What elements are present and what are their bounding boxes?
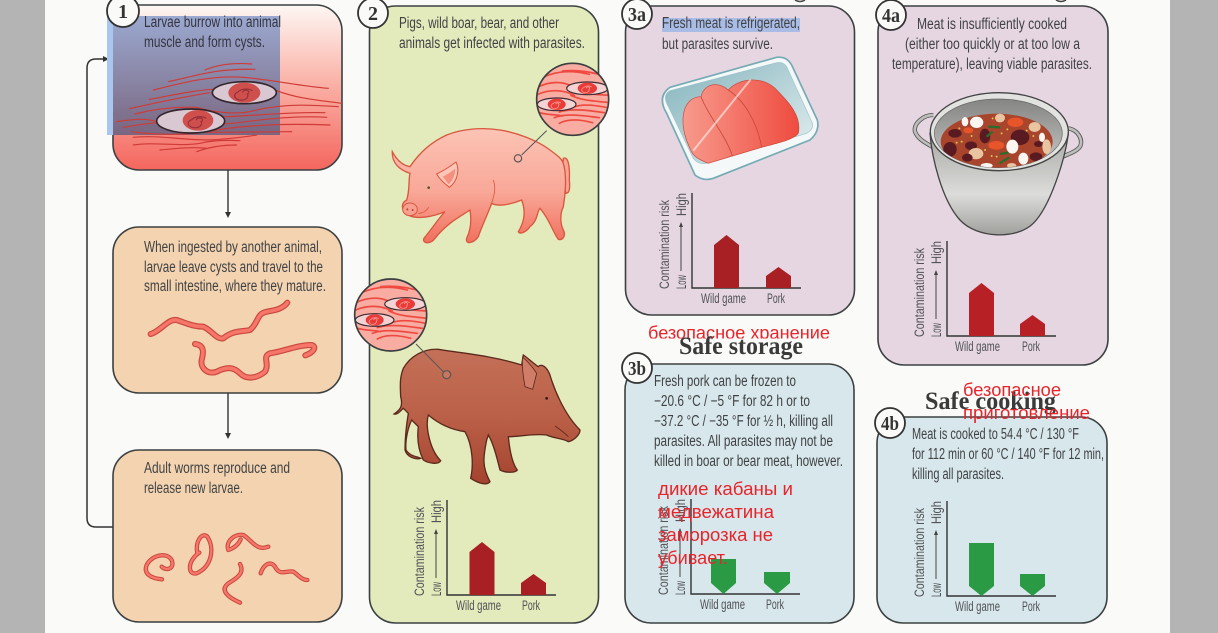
bar chart: refrigerated risk xyxy=(657,193,801,306)
bar chart: animals risk: Wild game xyxy=(456,598,501,613)
bar chart: animals risk: Low xyxy=(429,582,444,596)
icon: two long worms xyxy=(151,303,314,378)
badge 4b: 4b xyxy=(881,413,899,435)
badge 4b xyxy=(875,408,905,438)
text: ingested: larvae leave cysts and travel to the xyxy=(144,259,323,276)
bar chart: cooked risk: Contamination risk xyxy=(912,508,927,597)
text: freezing: Fresh pork can be frozen to xyxy=(654,373,796,390)
red annotation: safe storage in Russian, clipped: безопасное хранение xyxy=(648,323,830,343)
text: freezing: killed in boar or bear meat, however. xyxy=(654,453,843,470)
left grey margin xyxy=(0,0,45,633)
right grey margin xyxy=(1170,0,1218,633)
text: freezing xyxy=(654,373,843,470)
highlight overlay xyxy=(107,16,280,135)
bar chart: refrigerated risk: Wild game xyxy=(701,291,746,306)
icon: cooking pot xyxy=(915,93,1081,235)
bar chart: refrigerated risk: Contamination risk xyxy=(657,200,672,289)
panel: adult worms xyxy=(113,450,342,622)
panel 3a: refrigerated meat xyxy=(626,6,854,315)
bar chart: refrigerated risk: Pork xyxy=(767,291,785,306)
text: proper cooking xyxy=(912,426,1104,483)
text: infected animals: Pigs, wild boar, bear, and other xyxy=(399,15,559,32)
text: freezing: parasites. All parasites may not be xyxy=(654,433,833,450)
bar chart: frozen risk: Pork xyxy=(766,597,784,612)
text: ingested xyxy=(144,239,326,295)
badge 3a: 3a xyxy=(628,4,646,26)
icon: pig xyxy=(392,129,570,243)
text: refrigerated xyxy=(662,15,800,53)
inset: muscle detail for boar xyxy=(354,279,427,351)
bar chart: animals risk xyxy=(412,500,556,613)
text: refrigerated: but parasites survive. xyxy=(662,36,773,53)
panel 4b: proper cooking xyxy=(877,417,1107,623)
text: adult worms: release new larvae. xyxy=(144,480,243,497)
arrow: panel 1 to ingestion box xyxy=(225,170,231,218)
arrow: feedback loop from adult worms to larvae xyxy=(87,56,113,527)
panel: ingestion and maturing worms xyxy=(113,227,342,393)
text: proper cooking: Meat is cooked to 54.4 °C / 130 °F xyxy=(912,426,1079,443)
icon: meat tray xyxy=(662,57,818,179)
text: infected animals: animals get infected with parasites. xyxy=(399,35,585,52)
icon: wild boar xyxy=(394,344,580,484)
red annotation: boar and bear meat: заморозка не xyxy=(658,525,773,545)
badge 4a xyxy=(876,0,906,30)
bar chart: frozen risk xyxy=(656,499,800,612)
red annotation: boar and bear meat: убивает. xyxy=(658,548,728,568)
bar chart: refrigerated risk: Low xyxy=(674,275,689,289)
panel 2: infected animals xyxy=(354,6,609,623)
text: larvae burrow: Larvae burrow into animal xyxy=(144,14,281,31)
text: freezing: −20.6 °C / −5 °F for 82 h or to xyxy=(654,393,810,410)
red annotation: safe cooking in Russian xyxy=(963,380,1090,423)
text: ingested: small intestine, where they mature. xyxy=(144,278,326,295)
bar chart: frozen risk: Wild game xyxy=(700,597,745,612)
badge 3b: 3b xyxy=(628,358,646,380)
bar chart: cooked risk: Low xyxy=(929,583,944,597)
bar chart: frozen risk: Low xyxy=(673,581,688,595)
badge 1 xyxy=(107,0,139,27)
text: adult worms: Adult worms reproduce and xyxy=(144,460,290,477)
text: infected animals xyxy=(399,15,585,52)
text: insufficiently cooked: temperature), leaving viable parasites. xyxy=(892,56,1092,73)
badge 3a xyxy=(622,0,652,29)
icon: small larvae xyxy=(146,535,307,603)
panel 1: larvae in muscle xyxy=(107,5,342,170)
bar chart: frozen risk: Contamination risk xyxy=(656,506,671,595)
text: larvae burrow: muscle and form cysts. xyxy=(144,34,265,51)
panel 4a: undercooked meat xyxy=(878,6,1108,365)
panel 3b: freezing xyxy=(625,364,854,623)
bar chart: cooked risk: High xyxy=(929,501,944,524)
red annotation: safe cooking in Russian: приготовление xyxy=(963,403,1090,423)
bar chart: undercooked risk: Low xyxy=(929,323,944,337)
bar chart: undercooked risk: Contamination risk xyxy=(912,248,927,337)
badge 2: 2 xyxy=(368,3,378,25)
highlighted text highlight xyxy=(662,18,800,32)
cropped heading fragments at top edge xyxy=(795,0,1066,2)
red annotation: safe cooking in Russian: безопасное xyxy=(963,380,1061,400)
text: freezing: −37.2 °C / −35 °F for ½ h, killing all xyxy=(654,413,833,430)
text: insufficiently cooked: (either too quickly or at too low a xyxy=(905,36,1080,53)
badge 2 xyxy=(358,0,388,28)
red annotation: boar and bear meat: дикие кабаны и xyxy=(658,479,793,499)
bar chart: cooked risk xyxy=(912,501,1056,614)
inset: muscle detail for pig xyxy=(536,63,609,135)
muscle fibres and cysts xyxy=(117,64,342,152)
bar chart: animals risk: Pork xyxy=(522,598,540,613)
badge 1: 1 xyxy=(118,1,128,23)
heading: safe storage: Safe storage xyxy=(679,333,803,360)
bar chart: cooked risk: Wild game xyxy=(955,599,1000,614)
text: insufficiently cooked: Meat is insufficiently cooked xyxy=(917,16,1067,33)
badge 3b xyxy=(622,353,652,383)
bar chart: undercooked risk: High xyxy=(929,241,944,264)
bar chart: undercooked risk: Wild game xyxy=(955,339,1000,354)
text: insufficiently cooked xyxy=(892,16,1092,73)
text: proper cooking: for 112 min or 60 °C / 140 °F for 12 min, xyxy=(912,446,1104,463)
text: larvae burrow xyxy=(144,14,281,51)
bar chart: frozen risk: High xyxy=(673,499,688,522)
red annotation: boar and bear meat xyxy=(658,479,793,568)
text: proper cooking: killing all parasites. xyxy=(912,466,1004,483)
text: adult worms xyxy=(144,460,290,497)
bar chart: refrigerated risk: High xyxy=(674,193,689,216)
heading: safe cooking: Safe cooking xyxy=(925,388,1056,415)
bar chart: undercooked risk xyxy=(912,241,1056,354)
text: ingested: When ingested by another animal, xyxy=(144,239,322,256)
red annotation: boar and bear meat: медвежатина xyxy=(658,502,775,522)
bar chart: cooked risk: Pork xyxy=(1022,599,1040,614)
bar chart: animals risk: Contamination risk xyxy=(412,507,427,596)
bar chart: undercooked risk: Pork xyxy=(1022,339,1040,354)
arrow: ingestion box to adult worms box xyxy=(225,393,231,439)
badge 4a: 4a xyxy=(882,5,900,27)
text: refrigerated: Fresh meat is refrigerated, xyxy=(662,15,800,32)
bar chart: animals risk: High xyxy=(429,500,444,523)
